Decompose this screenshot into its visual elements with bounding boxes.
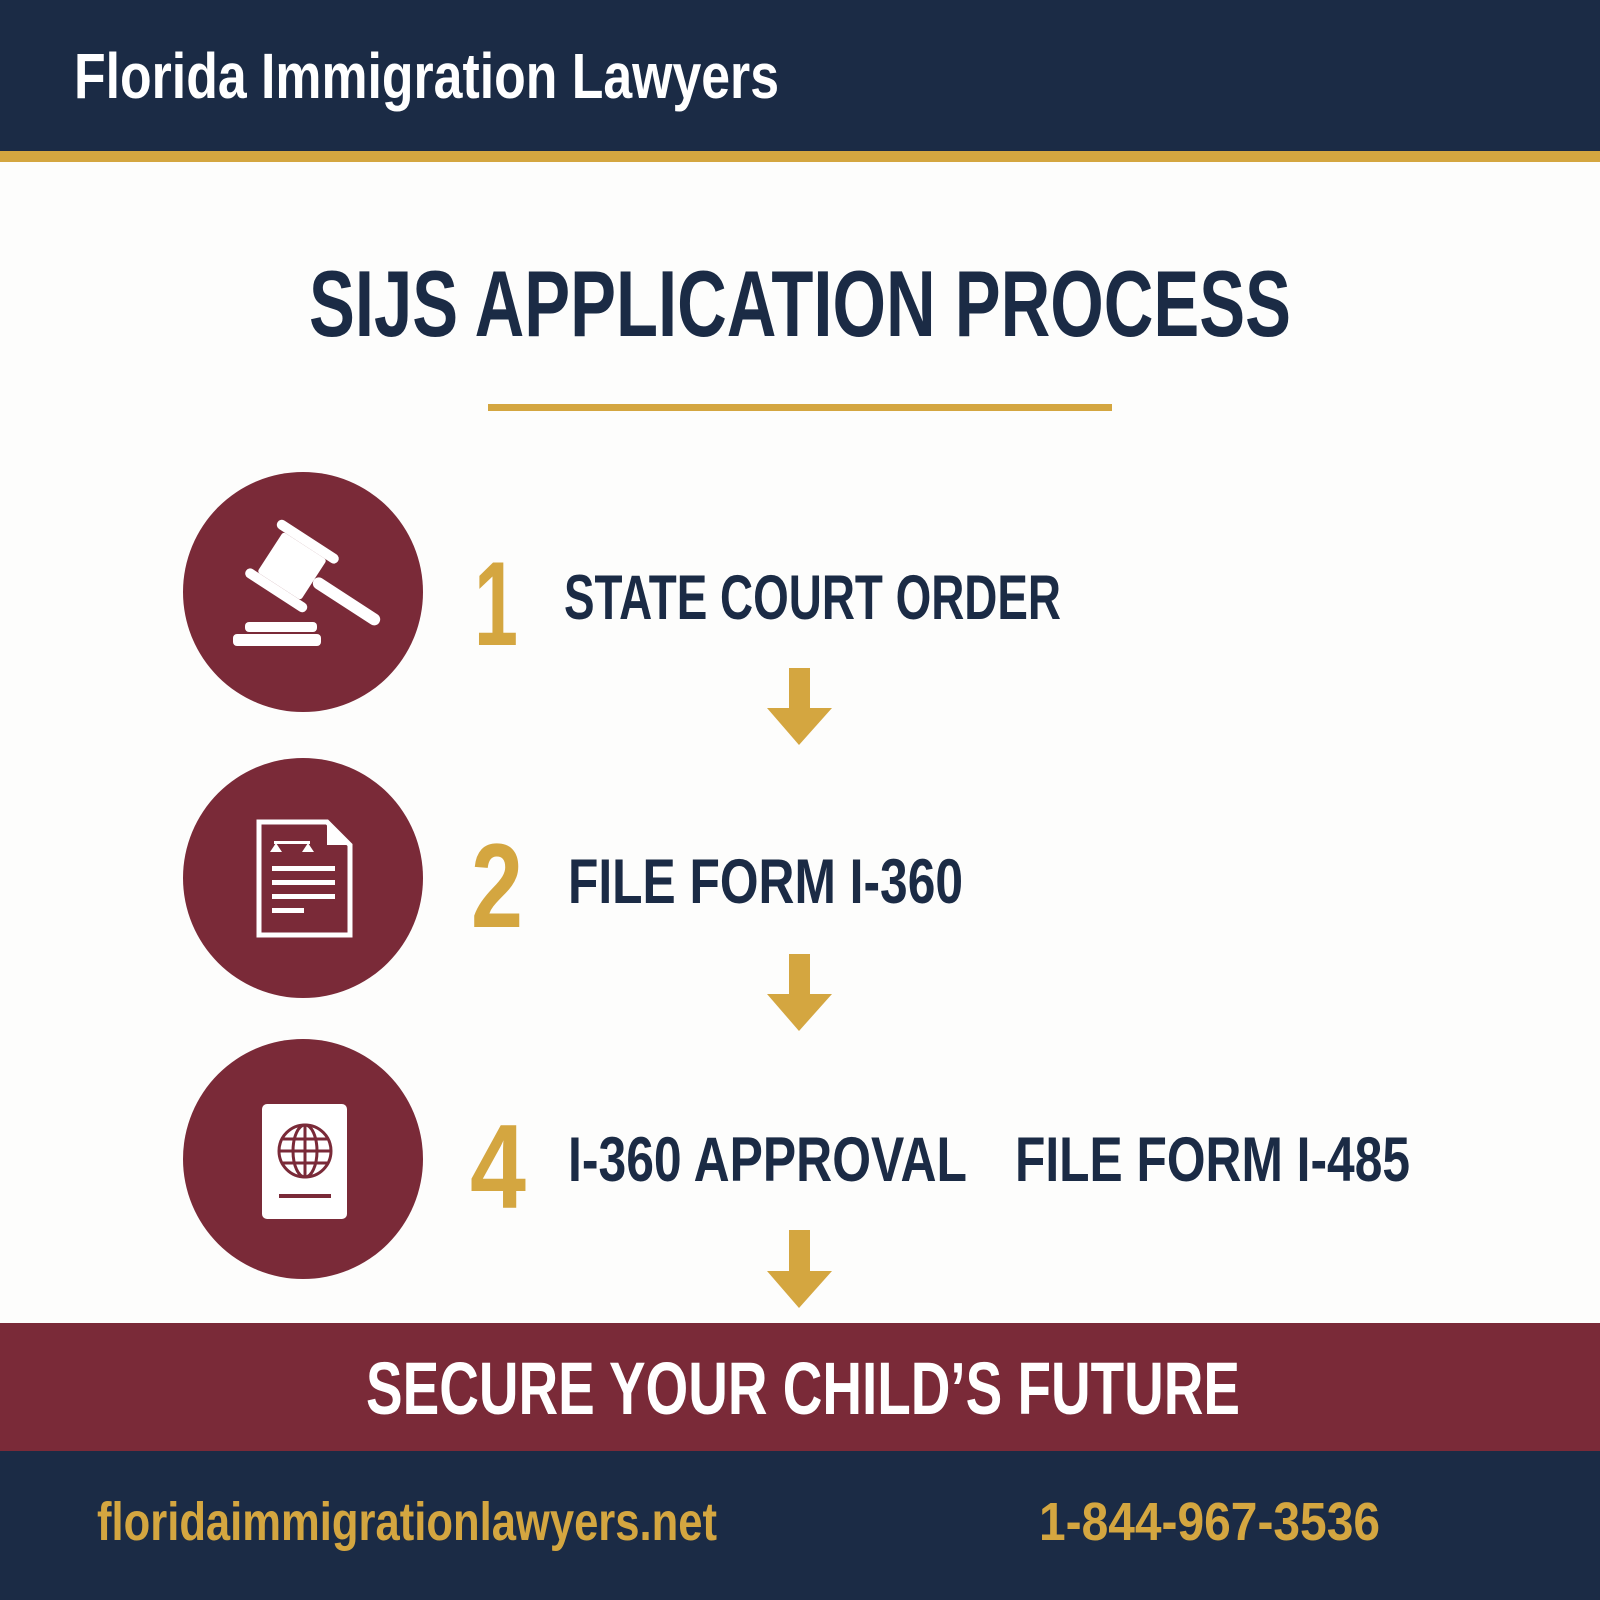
step 1 (183, 472, 1061, 712)
title underline (488, 404, 1112, 411)
footer (0, 1451, 1600, 1600)
header title: Florida Immigration Lawyers (74, 40, 779, 112)
arrow 1 (767, 668, 832, 745)
banner: SECURE YOUR CHILD’S FUTURE (366, 1347, 1240, 1430)
number 1: 1 (474, 537, 518, 671)
phone: 1-844-967-3536 (1039, 1492, 1380, 1552)
icon: document (183, 758, 423, 998)
step 2 label: FILE FORM I-360 (568, 847, 963, 917)
step 3 (183, 1039, 1410, 1279)
step 2 (183, 758, 963, 998)
header bar (0, 0, 1600, 162)
arrow 2 (767, 954, 832, 1031)
icon: gavel (183, 472, 423, 712)
step 3 label: I-360 APPROVAL (568, 1125, 967, 1195)
banner (0, 1323, 1600, 1451)
step 4 label: FILE FORM I-485 (1015, 1125, 1410, 1195)
number 2: 2 (471, 819, 523, 953)
arrow 3 (767, 1230, 832, 1308)
step 1 label: STATE COURT ORDER (564, 563, 1061, 633)
number 4: 4 (470, 1100, 526, 1234)
website: floridaimmigrationlawyers.net (97, 1492, 717, 1552)
icon: passport (183, 1039, 423, 1279)
